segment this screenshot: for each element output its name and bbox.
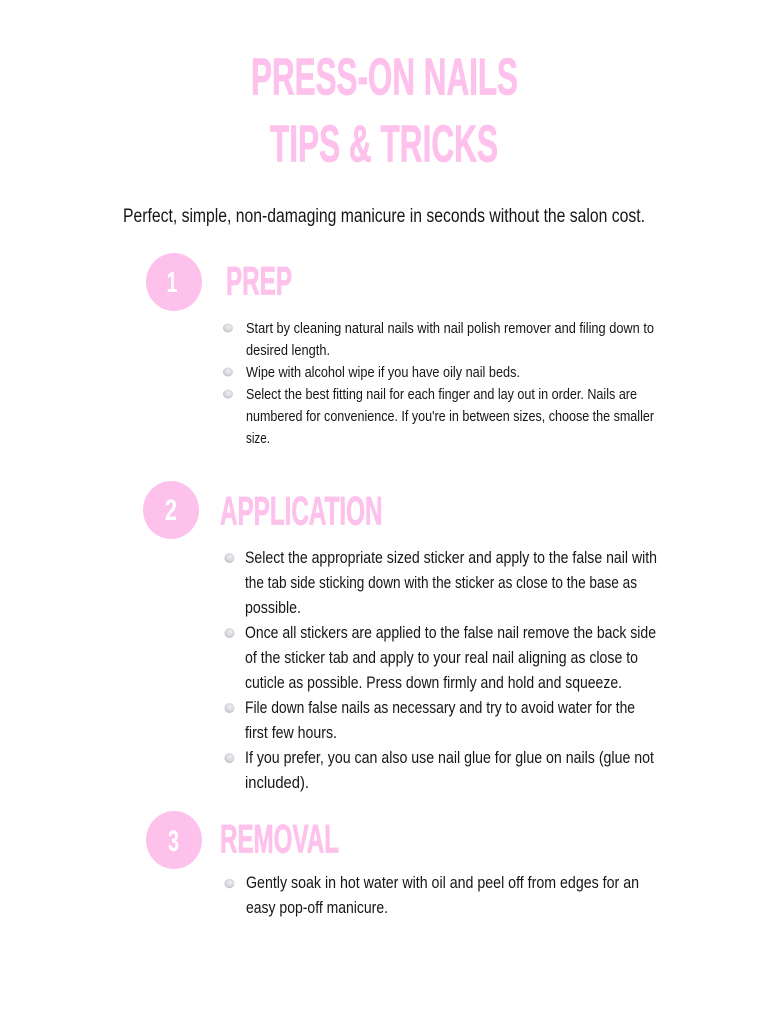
panel: step 1 prep <box>146 253 654 447</box>
list: application steps: included). <box>245 773 309 792</box>
list: application steps: of the sticker tab and apply to your real nail aligning as close to <box>245 648 638 667</box>
list: prep steps: size. <box>246 431 270 447</box>
title <box>251 49 518 174</box>
step 3 badge <box>146 811 202 869</box>
list: application steps: first few hours. <box>245 723 337 742</box>
list: application steps: cuticle as possible. Press down firmly and hold and squeeze. <box>245 673 622 692</box>
list: removal steps: Gently soak in hot water with oil and peel off from edges for an <box>246 873 639 892</box>
step 3 badge: 3 <box>168 825 179 858</box>
list: application steps <box>224 548 657 792</box>
list: prep steps: Start by cleaning natural nails with nail polish remover and filing down to <box>246 321 654 337</box>
panel: step 2 application <box>143 481 657 792</box>
panel: step 3 removal <box>146 811 639 917</box>
step 2 badge: 2 <box>165 494 177 527</box>
intro text: Perfect, simple, non-damaging manicure in seconds without the salon cost. <box>123 206 645 227</box>
heading: prep: PREP <box>226 260 292 304</box>
title: PRESS-ON NAILS <box>251 49 518 107</box>
title: TIPS & TRICKS <box>270 116 498 174</box>
list: removal steps <box>224 873 639 917</box>
step 1 badge <box>146 253 202 311</box>
step 2 badge <box>143 481 199 539</box>
list: application steps: File down false nails as necessary and try to avoid water for the <box>245 698 635 717</box>
list: removal steps: easy pop-off manicure. <box>246 898 388 917</box>
list: prep steps: Wipe with alcohol wipe if you have oily nail beds. <box>246 365 520 381</box>
list: application steps: Select the appropriate sized sticker and apply to the false nail with <box>245 548 657 567</box>
step 1 badge: 1 <box>166 267 178 299</box>
list: prep steps <box>223 321 654 447</box>
heading: application: APPLICATION <box>220 490 382 534</box>
list: prep steps: desired length. <box>246 343 330 359</box>
list: application steps: If you prefer, you can also use nail glue for glue on nails (glue not <box>245 748 654 767</box>
list: application steps: the tab side sticking down with the sticker as close to the base as <box>245 573 637 592</box>
heading: removal: REMOVAL <box>220 818 339 862</box>
list: prep steps: Select the best fitting nail for each finger and lay out in order. Nails are <box>246 387 637 403</box>
list: application steps: possible. <box>245 598 301 617</box>
list: prep steps: numbered for convenience. If you're in between sizes, choose the smaller <box>246 409 654 425</box>
list: application steps: Once all stickers are applied to the false nail remove the back side <box>245 623 656 642</box>
